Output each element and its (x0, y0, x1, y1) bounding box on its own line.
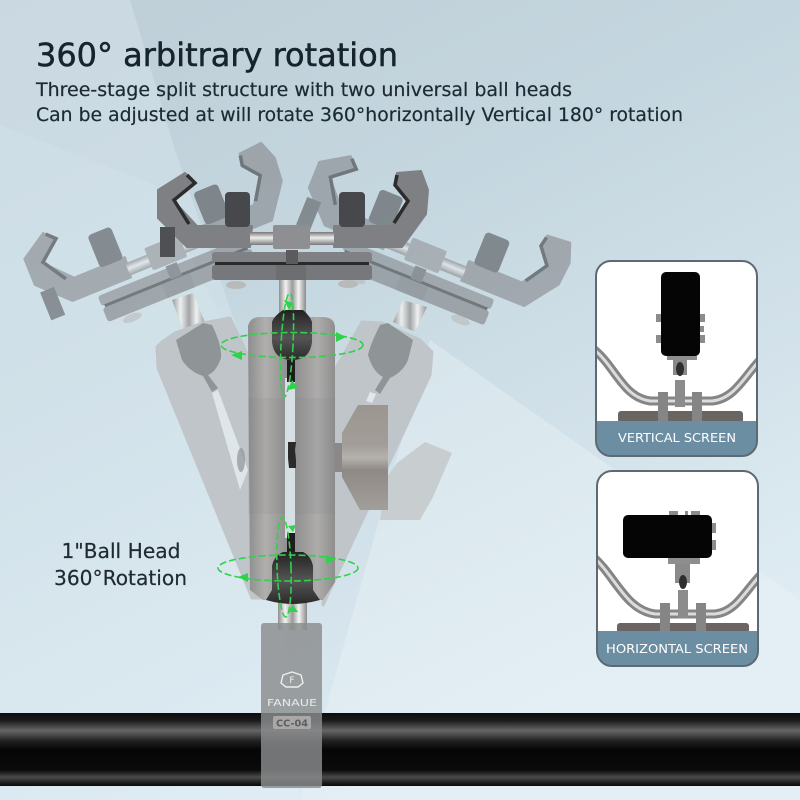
lower ball (266, 552, 320, 604)
faded right clamp position (282, 144, 577, 355)
handlebar (592, 556, 764, 614)
mount base with logo (261, 623, 322, 788)
panel: vertical screen (592, 261, 762, 456)
faded left clamp position (17, 140, 312, 351)
faded left arm (157, 293, 262, 598)
mount base with logo: FANAUE (267, 698, 317, 709)
faded right arm (323, 300, 432, 605)
green rotation arrows: lower (218, 517, 358, 617)
subtitle text block (35, 79, 683, 126)
upper ball (272, 310, 312, 360)
panel: vertical screen: VERTICAL SCREEN (618, 430, 736, 445)
black handlebar (0, 713, 800, 786)
upper post (279, 280, 306, 314)
ball head label: 1"Ball Head (62, 539, 180, 563)
handlebar (592, 348, 762, 401)
lower post (278, 600, 307, 630)
subtitle text block: Three-stage split structure with two universal ball heads (35, 79, 572, 101)
ball head label (54, 539, 187, 590)
green rotation arrows: upper (221, 293, 363, 397)
ball head label: 360°Rotation (54, 566, 187, 590)
title: 360° arbitrary rotation (36, 36, 398, 74)
faded knob (380, 442, 452, 520)
main clamp (158, 171, 428, 289)
mount base with logo: F (289, 676, 295, 686)
panel: horizontal screen (592, 471, 764, 666)
panel: horizontal screen: HORIZONTAL SCREEN (606, 641, 748, 656)
mount base with logo: CC-04 (276, 718, 308, 730)
main knob (335, 405, 388, 510)
main arm (248, 317, 335, 600)
subtitle text block: Can be adjusted at will rotate 360°horizontally Vertical 180° rotation (36, 104, 683, 126)
